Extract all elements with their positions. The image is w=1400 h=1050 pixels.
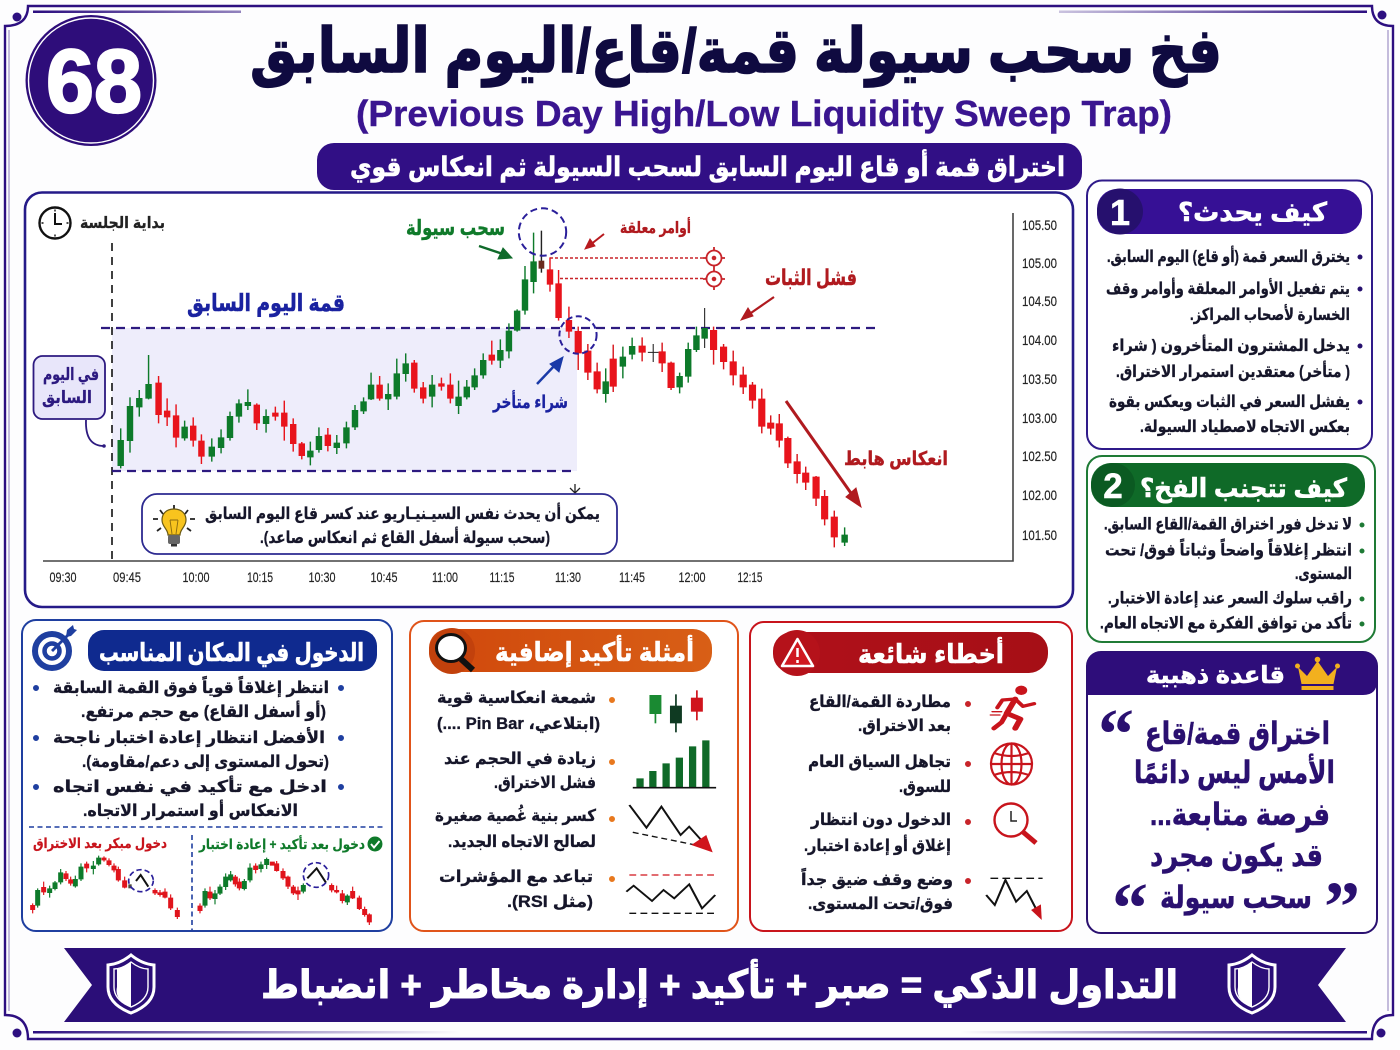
header pill: 2 (1103, 467, 1123, 506)
horizontal divider (29, 826, 386, 828)
icon: minor structure break (629, 805, 713, 852)
body text: راقب سلوك السعر عند إعادة الاختبار. (1108, 590, 1352, 608)
label: liquidity sweep: سحب سيولة (406, 217, 505, 240)
callout: same scenario at the low (142, 494, 617, 554)
subtitle pill: اختراق قمة أو قاع اليوم السابق لسحب السيولة ثم انعكاس قوي (350, 149, 1065, 183)
panel: entering at the right place (22, 620, 392, 931)
label: bearish reversal: انعكاس هابط (844, 449, 948, 470)
header (1087, 652, 1377, 695)
quotation marks: “ (1112, 868, 1148, 948)
quotation marks: ” (1324, 867, 1360, 947)
icon: warning triangle (782, 639, 813, 666)
quote text: سحب سيولة (1160, 880, 1312, 916)
quote text: قد يكون مجرد (1150, 838, 1323, 874)
quote text: فرصة متابعة... (1150, 797, 1330, 833)
price axis labels: 104.00 (1022, 332, 1057, 348)
label: late buying: شراء متأخر (492, 390, 568, 413)
body text: يدخل المشترون المتأخرون ( شراء (1112, 335, 1350, 356)
body text: بعكس الاتجاه لاصطياد السيولة. (1140, 418, 1350, 437)
quote text: اختراق قمة/قاع (1145, 716, 1330, 752)
header pill: أمثلة تأكيد إضافية (495, 635, 694, 668)
body text: تباعد مع المؤشرات (439, 868, 593, 887)
arrow: pending orders (585, 234, 604, 249)
icon: globe (991, 744, 1032, 784)
mini chart: early entry (33, 856, 177, 919)
previous day range shading (112, 328, 577, 471)
quotation marks: “ (1098, 694, 1134, 774)
panel: chart (25, 192, 1073, 607)
icon: clock magnifier (994, 804, 1036, 843)
late buying highlight circle (559, 316, 597, 354)
body text: زيادة في الحجم عند (444, 750, 596, 769)
body text: ادخل مع تأكيد في نفس اتجاه (53, 776, 327, 797)
body text: الأفضل انتظار إعادة اختبار ناجحة (53, 727, 325, 747)
body text: بعد الاختراق. (858, 717, 951, 736)
icon: light bulb (153, 505, 195, 546)
time axis labels: 09:45 (113, 569, 141, 585)
arrow: bearish reversal (786, 401, 861, 507)
bottom banner: التداول الذكي = صبر + تأكيد + إدارة مخاطر + انضباط (261, 959, 1178, 1008)
body text: يفشل السعر في الثبات ويعكس بقوة (1109, 393, 1350, 412)
time axis labels: 10:30 (308, 569, 336, 585)
icon: crown (1295, 657, 1340, 690)
header pill: كيف تتجنب الفخ؟ (1140, 473, 1348, 504)
panel: how to avoid the trap (1087, 456, 1375, 642)
label: failure to hold: فشل الثبات (765, 265, 857, 290)
mini chart: confirmed entry (200, 858, 369, 925)
bullet points (36, 688, 341, 787)
callout: same scenario at the low: يمكن أن يحدث نفس السيـنيـاريو عند كسر قاع اليوم السابق (205, 503, 600, 524)
body text: مطاردة القمة/القاع (809, 693, 951, 711)
body text (1100, 516, 1352, 634)
label: confirmed entry: دخول بعد تأكيد + إعادة اختبار (198, 835, 365, 853)
arrow: to late buying (537, 357, 563, 384)
time axis labels: 11:45 (619, 569, 645, 585)
body text (53, 675, 329, 821)
time axis labels: 12:00 (678, 569, 706, 585)
label: session start: بداية الجلسة (80, 215, 165, 232)
price axis labels: 105.00 (1022, 255, 1057, 271)
body text: فشل الاختراق. (494, 774, 596, 793)
candlesticks: range before sweep (121, 231, 569, 468)
icon: rising volume (633, 740, 716, 788)
subtitle pill (317, 143, 1082, 190)
body text: لصالح الاتجاه الجديد. (448, 833, 596, 852)
previous day low line (112, 470, 577, 472)
price axis labels: 102.50 (1022, 448, 1057, 464)
time axis labels: 11:30 (555, 569, 581, 585)
bullet points (609, 700, 615, 879)
bottom banner (64, 948, 1346, 1022)
quote text (1134, 716, 1335, 916)
candlesticks: after sweep and bearish reversal (578, 308, 845, 547)
body text: للسوق. (899, 778, 951, 797)
price axis labels: 103.50 (1022, 371, 1057, 387)
price axis labels: 101.50 (1022, 527, 1057, 543)
sweep highlight circle (519, 208, 566, 256)
price axis labels: 105.50 (1022, 217, 1057, 233)
time axis labels: 10:45 (370, 569, 398, 585)
header pill: كيف يحدث؟ (1178, 197, 1328, 227)
panel: extra confirmation examples (410, 621, 738, 931)
body text: فوق/تحت المستوى. (808, 895, 953, 914)
icon: tight stop (986, 878, 1043, 920)
header pill (1091, 463, 1365, 507)
arrow: to liquidity sweep (479, 246, 512, 259)
body text: الخسارة لأصحاب المراكز. (1190, 304, 1350, 325)
time axis labels (50, 569, 763, 585)
header pill (773, 630, 1048, 676)
icon: right shield (1229, 955, 1275, 1013)
previous day high line (101, 327, 878, 329)
small pointer above note (570, 484, 580, 493)
header pill (88, 630, 377, 671)
label: previous day high: قمة اليوم السابق (187, 290, 345, 317)
body text (435, 689, 600, 911)
time axis labels: 11:15 (490, 569, 515, 585)
quote text: الأمس ليس دائمًا (1134, 753, 1335, 791)
session start vertical line (111, 243, 113, 561)
time axis labels: 10:15 (247, 569, 273, 585)
price axis labels: 104.50 (1022, 293, 1057, 309)
bullet points (965, 704, 971, 881)
icon: session clock (40, 208, 70, 238)
price axis labels: 103.00 (1022, 410, 1057, 426)
body text: إغلاق أو إعادة اختبار. (804, 835, 951, 856)
body text: (أو أسفل القاع) مع حجم مرتفع. (81, 701, 326, 722)
icon: magnifier (436, 634, 473, 670)
title: فخ سحب سيولة قمة/قاع/اليوم السابق (250, 17, 1222, 88)
time axis labels: 12:15 (738, 569, 763, 585)
callout: previous day (34, 356, 106, 448)
panel: golden rule (1087, 652, 1377, 948)
body text: الدخول دون انتظار (810, 811, 951, 830)
callout: same scenario at the low: (سحب سيولة أسفل القاع ثم انعكاس صاعد). (260, 527, 550, 548)
body text: الانعكاس أو استمرار الاتجاه. (83, 800, 298, 821)
icon: left shield (108, 955, 154, 1013)
body text (801, 693, 953, 914)
icon: green check (368, 836, 382, 852)
number badge 68: 68 (46, 32, 142, 132)
time axis labels: 10:00 (182, 569, 210, 585)
quotation marks (1098, 694, 1360, 948)
bullet points (1360, 525, 1364, 624)
callout: previous day: السابق (42, 388, 92, 408)
body text: انتظر إغلاقاً قوياً فوق القمة السابقة (53, 675, 329, 698)
callout: previous day: في اليوم (43, 365, 99, 385)
body text: كسر بنية غُصية صغيرة (435, 804, 596, 826)
axes (43, 213, 1013, 561)
body text: (ابتلاعي، Pin Bar ....) (437, 715, 600, 734)
body text: المستوى. (1295, 565, 1352, 584)
header pill: أخطاء شائعة (858, 637, 1004, 669)
time axis labels: 09:30 (50, 569, 77, 585)
label: pending orders: أوامر معلقة (620, 217, 691, 237)
header pill (429, 628, 712, 674)
arrow: failure to hold (741, 297, 774, 320)
icon: target with arrow (35, 625, 77, 668)
body text: (مثل RSI). (507, 893, 593, 911)
icon: indicator divergence (626, 875, 717, 913)
header pill (1097, 188, 1362, 234)
panel: how it happens (1087, 180, 1372, 449)
number badge 68 (26, 15, 156, 146)
header pill: الدخول في المكان المناسب (99, 639, 364, 668)
body text: انتظر إغلاقاً واضحاً وثباتاً فوق/ تحت (1105, 538, 1352, 560)
panel: common mistakes (750, 622, 1072, 931)
header pill: 1 (1110, 192, 1130, 233)
price axis labels: 102.00 (1022, 487, 1057, 503)
price axis labels (1022, 217, 1057, 543)
body text: (تحول المستوى إلى دعم/مقاومة). (82, 753, 329, 772)
icon: reversal candles (655, 690, 697, 732)
body text: تأكد من توافق الفكرة مع الاتجاه العام. (1100, 612, 1352, 634)
label: early entry: دخول مبكر بعد الاختراق (33, 835, 167, 852)
header: قاعدة ذهبية (1146, 662, 1285, 689)
body text: وضع وقف ضيق جداً (801, 867, 953, 890)
body text: تجاهل السياق العام (808, 753, 951, 771)
icon: runner (990, 686, 1034, 728)
bullet points (1358, 257, 1362, 402)
body text: ( متأخر) معتقدين استمرار الاختراق. (1116, 361, 1350, 382)
body text: شمعة انعكاسية قوية (437, 689, 596, 708)
vertical divider (191, 835, 193, 930)
english subtitle: (Previous Day High/Low Liquidity Sweep Trap) (356, 93, 1172, 134)
time axis labels: 11:00 (432, 569, 458, 585)
body text (1106, 246, 1350, 437)
pending order stop lines and targets (550, 247, 725, 290)
